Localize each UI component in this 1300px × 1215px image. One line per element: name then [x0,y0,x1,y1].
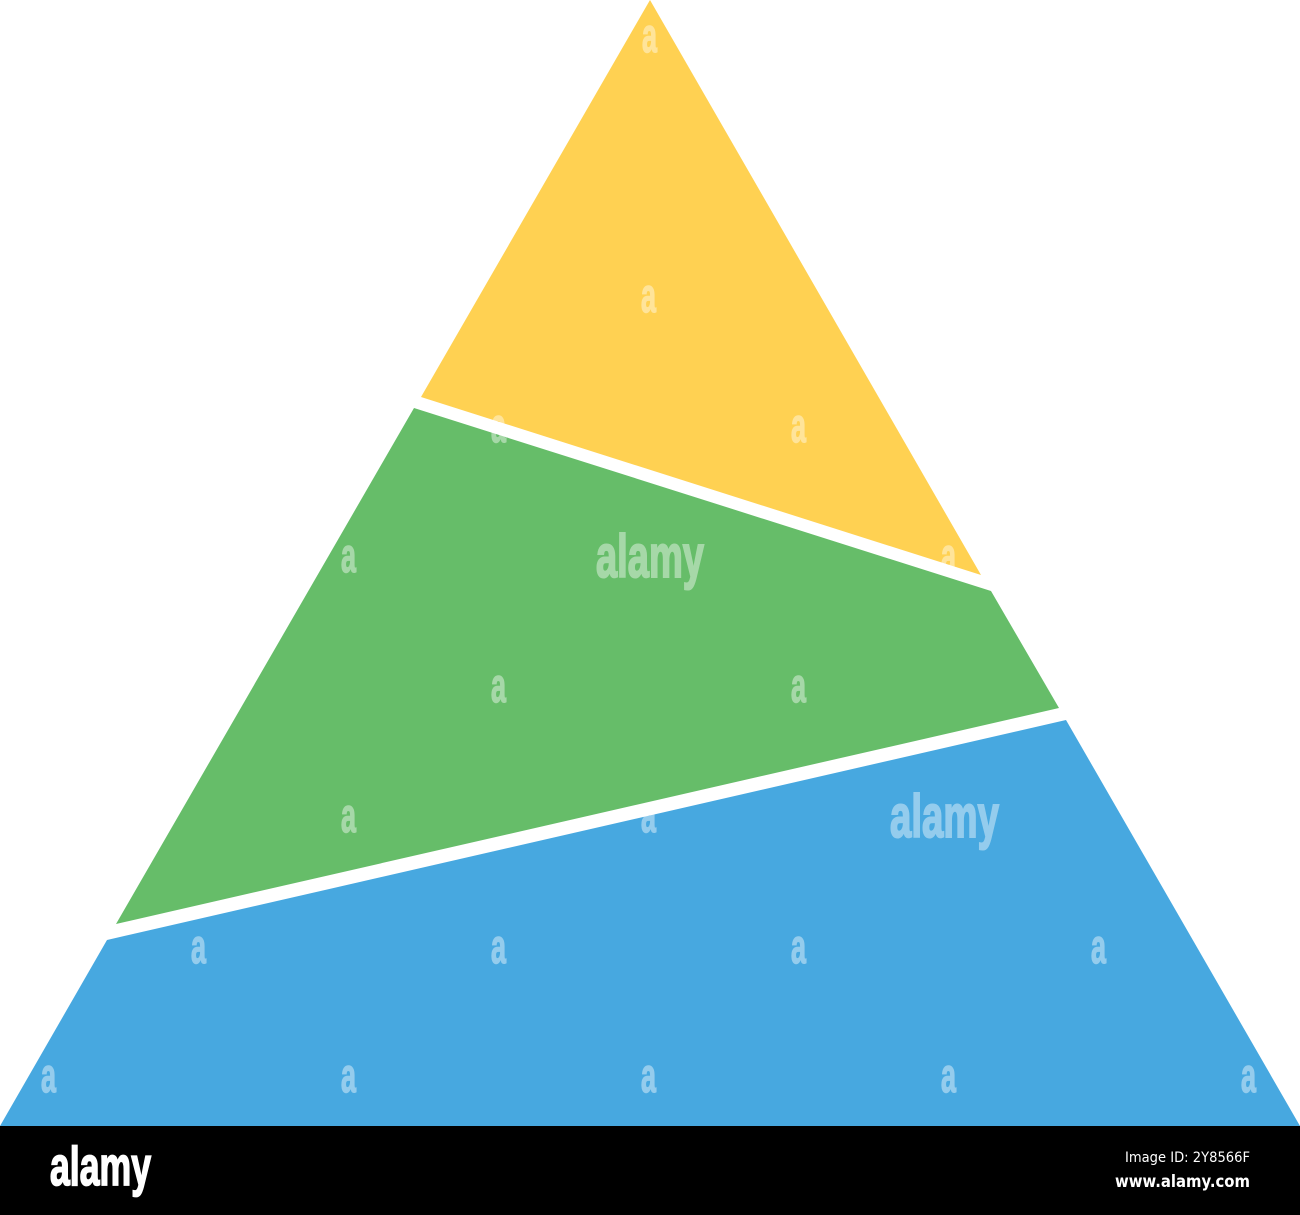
watermark: repeated stock marks: a [1091,921,1106,974]
watermark: repeated stock marks: a [341,530,356,583]
watermark: repeated stock marks: a [642,10,657,63]
watermark: repeated stock marks: a [641,270,656,323]
watermark: repeated stock marks: alamy [890,783,999,850]
footer image id: Image ID: 2Y8566F [1125,1150,1250,1166]
watermark: repeated stock marks: a [641,1050,656,1103]
watermark: repeated stock marks: a [791,400,806,453]
watermark: repeated stock marks: a [341,790,356,843]
watermark: repeated stock marks: a [1241,1050,1256,1103]
watermark: repeated stock marks: a [791,921,806,974]
watermark: repeated stock marks: a [941,530,956,583]
pyramid tier: bottom blue [0,720,1300,1126]
watermark: repeated stock marks: a [191,921,206,974]
footer url: www.alamy.com [1115,1172,1250,1191]
watermark: repeated stock marks: a [41,1050,56,1103]
pyramid tier: top yellow [421,0,981,575]
watermark: repeated stock marks: a [941,1050,956,1103]
watermark: repeated stock marks: alamy [596,523,704,590]
watermark: repeated stock marks: a [791,660,806,713]
watermark: repeated stock marks: a [641,790,656,843]
watermark: repeated stock marks: a [491,660,506,713]
footer logo: alamy [50,1135,151,1197]
footer bar [0,1126,1300,1215]
watermark: repeated stock marks: a [341,1050,356,1103]
watermark: repeated stock marks: a [491,400,506,453]
pyramid tier: middle green [116,408,1059,924]
watermark: repeated stock marks: a [491,921,506,974]
